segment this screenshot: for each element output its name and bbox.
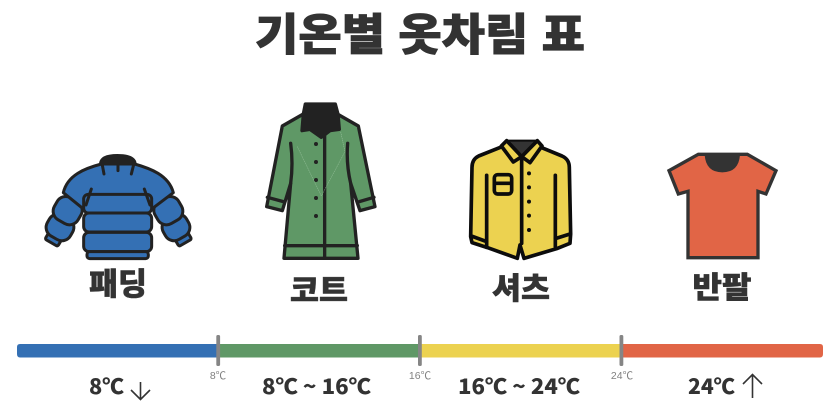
tick marks — [216, 335, 623, 366]
icon: padded jacket — [42, 155, 194, 259]
label: padded jacket: 패딩 — [89, 259, 147, 304]
tick label: 16℃: 16℃ — [409, 370, 432, 382]
arrow: down — [131, 382, 150, 400]
temperature bar — [17, 335, 823, 366]
range label: 16℃ to 24℃: 16℃ ~ 24℃ — [458, 371, 580, 401]
range label: 24℃ and above — [688, 371, 762, 401]
arrow: up — [743, 374, 762, 398]
icon: shirt — [471, 141, 571, 258]
icon: coat — [267, 104, 375, 258]
tick label: 8℃: 8℃ — [210, 370, 227, 382]
label: shirt: 셔츠 — [492, 264, 550, 308]
label: t-shirt: 반팔 — [692, 263, 752, 307]
title: 기온별 옷차림 표 — [255, 0, 585, 63]
range label: 8℃ and below: 8℃ — [89, 371, 124, 401]
range label: 8℃ to 16℃: 8℃ ~ 16℃ — [262, 371, 371, 401]
label: coat: 코트 — [290, 266, 348, 310]
tick label: 24℃: 24℃ — [611, 370, 634, 382]
icon: t-shirt — [669, 154, 776, 258]
range label: 8℃ and below — [89, 371, 150, 401]
range label: 24℃ and above: 24℃ — [688, 371, 735, 401]
